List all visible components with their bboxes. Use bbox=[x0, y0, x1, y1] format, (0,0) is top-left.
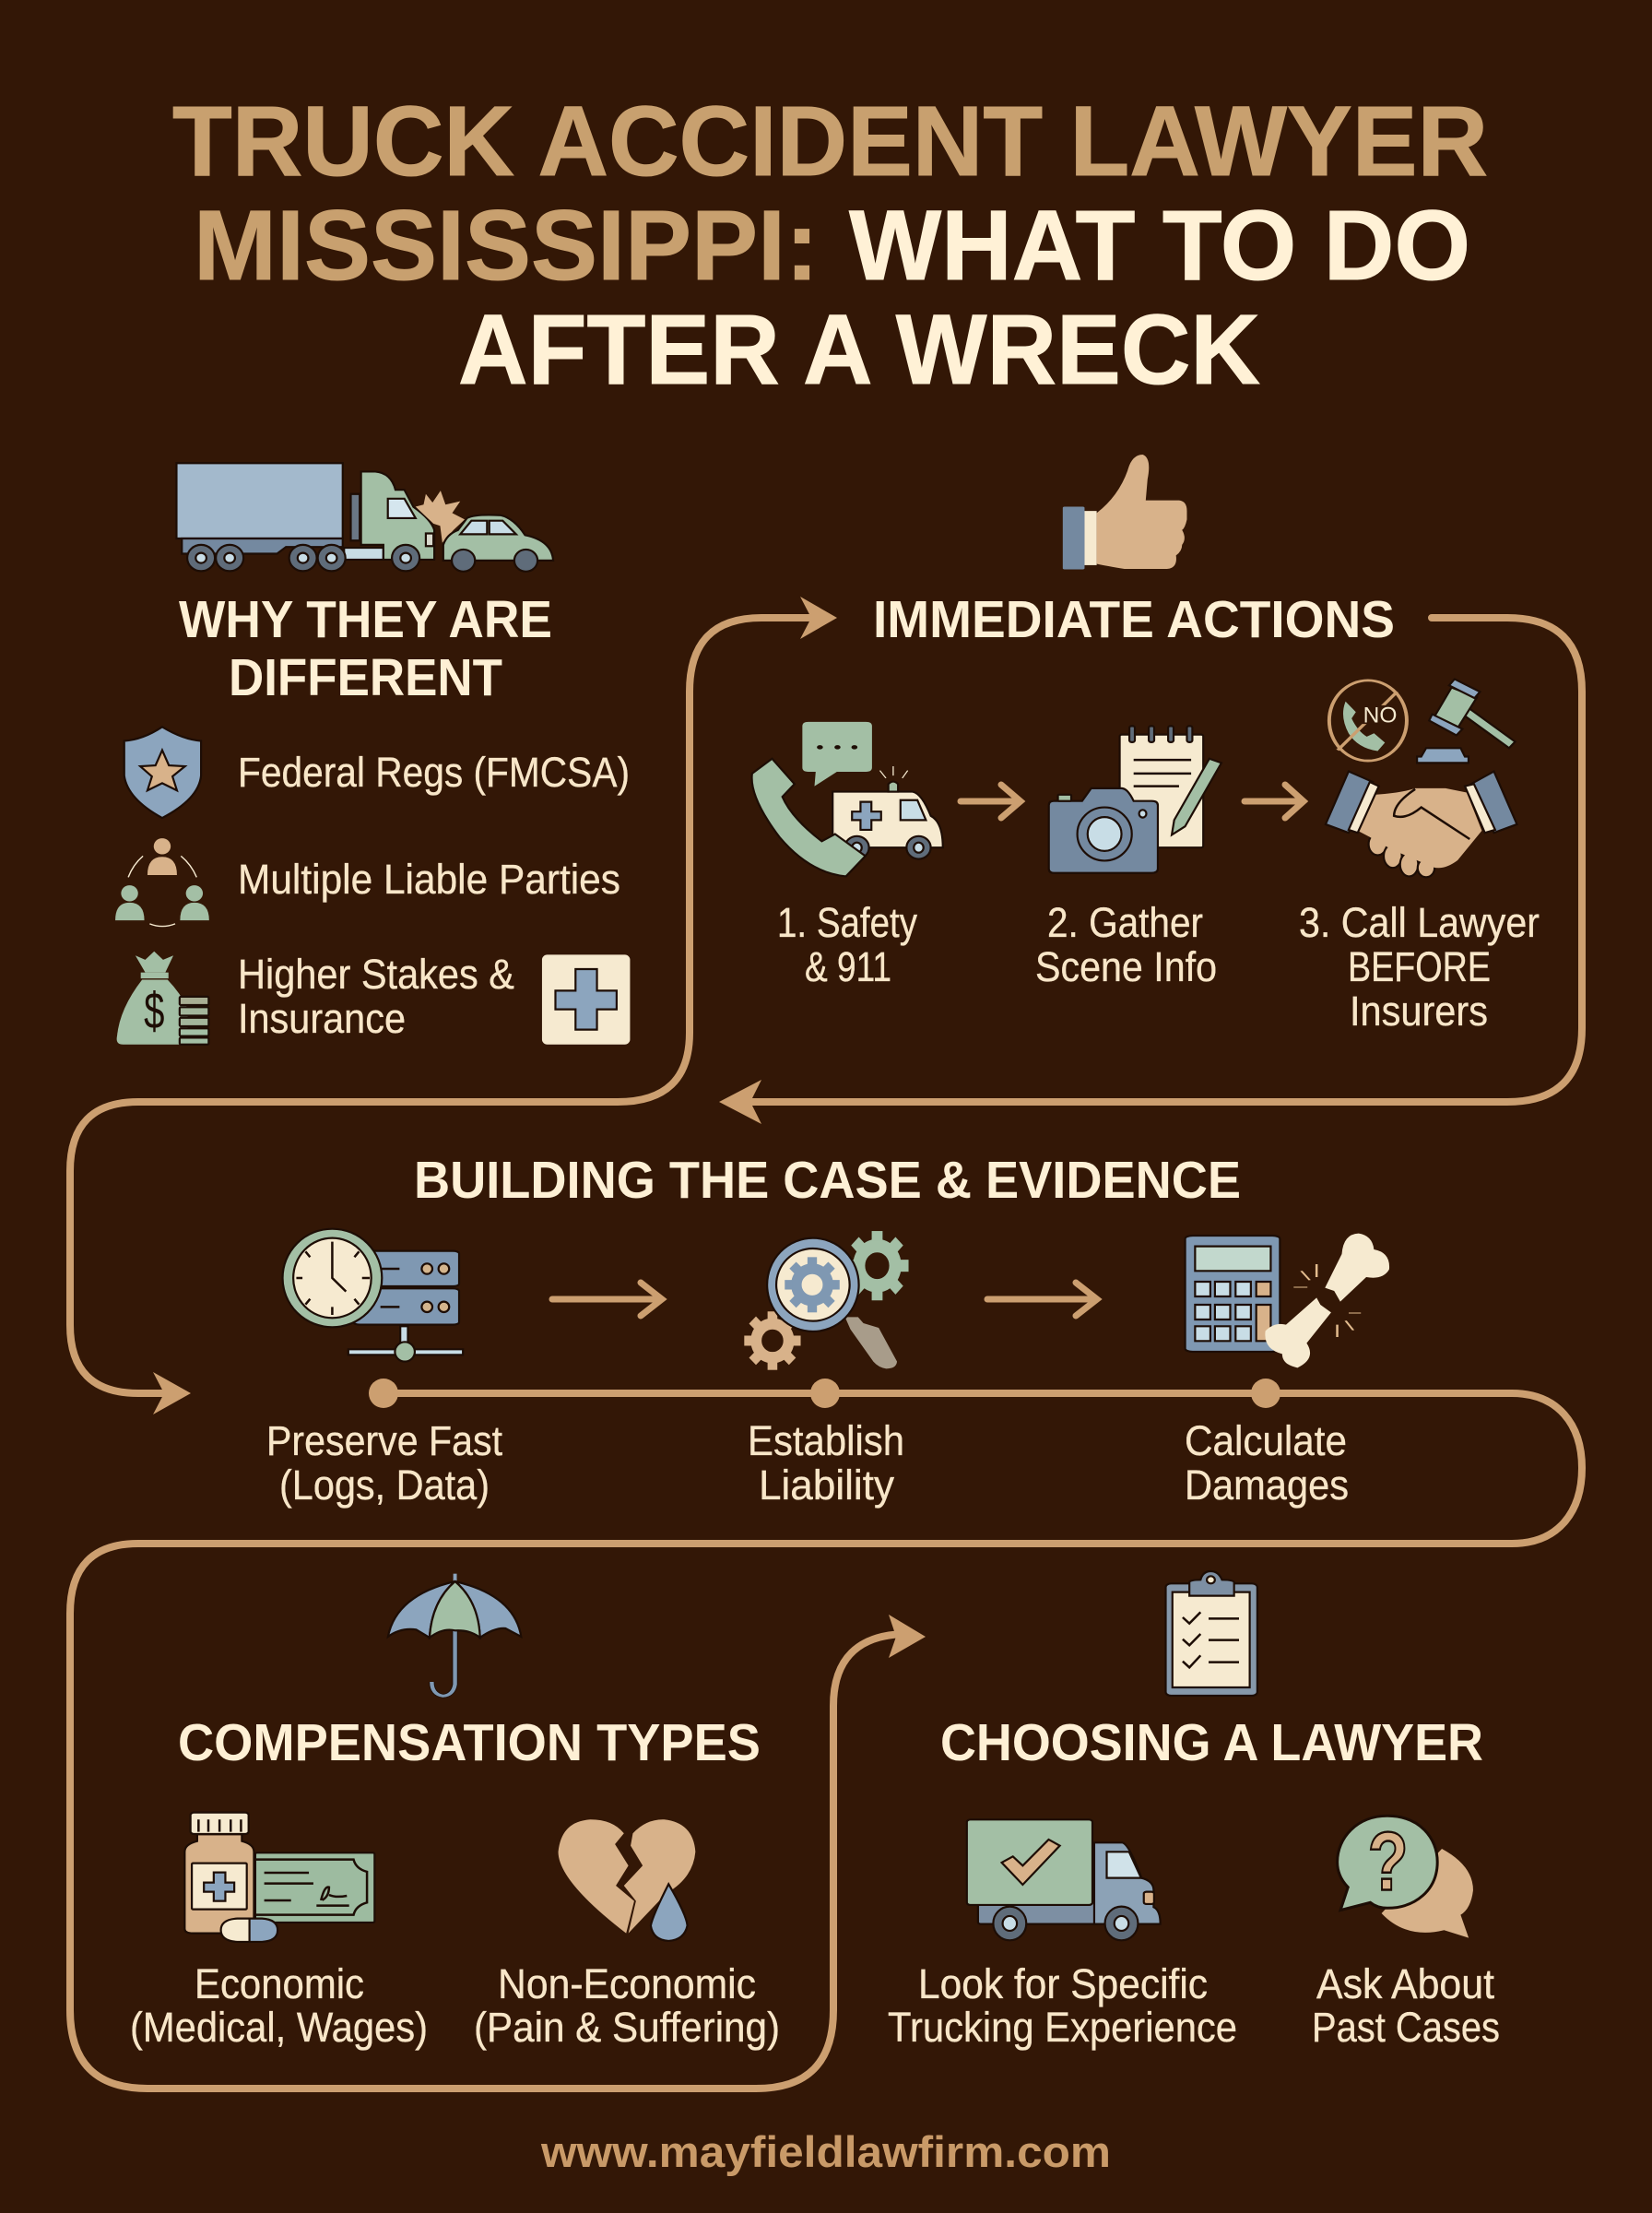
text: higher stakes and insurance bbox=[238, 951, 514, 1042]
text: non-economic bbox=[474, 1960, 780, 2051]
text: preserve fast bbox=[266, 1417, 502, 1509]
icon: thumbs up bbox=[1063, 455, 1186, 570]
text: gather scene info: 2. Gather bbox=[1047, 899, 1203, 946]
text: safety and 911: & 911 bbox=[805, 943, 891, 990]
panel: compensation types bbox=[130, 1574, 780, 2051]
flow path: immediate actions around to building the case bbox=[719, 618, 1582, 1124]
icon: no calls, gavel and handshake: NO bbox=[1363, 703, 1397, 728]
icon: multiple people in a circle bbox=[115, 838, 209, 927]
text: safety and 911: 1. Safety bbox=[777, 899, 917, 946]
text: look for specific experience: Trucking Experience bbox=[888, 2004, 1237, 2051]
panel: why they are different bbox=[115, 463, 630, 1045]
text: economic bbox=[130, 1960, 428, 2051]
text: calculate damages bbox=[1185, 1417, 1349, 1509]
icon: shield with star bbox=[124, 727, 201, 818]
text: ask about past cases: Past Cases bbox=[1312, 2004, 1500, 2051]
text: call lawyer before insurers: Insurers bbox=[1350, 988, 1488, 1035]
icon: no calls, gavel and handshake bbox=[1326, 679, 1517, 877]
icon: truck crashing into car bbox=[176, 463, 553, 572]
icon: clipboard checklist bbox=[1165, 1571, 1257, 1696]
text: higher stakes and insurance: Insurance bbox=[238, 995, 406, 1042]
title: WHAT TO DO bbox=[849, 189, 1470, 301]
arrow bbox=[552, 1283, 662, 1316]
text: establish liability bbox=[748, 1417, 904, 1509]
text: higher stakes and insurance: Higher Stakes & bbox=[238, 951, 514, 998]
text: preserve fast: Preserve Fast bbox=[266, 1417, 502, 1464]
text: calculate damages: Damages bbox=[1185, 1462, 1349, 1509]
icon: camera and notepad with pen bbox=[1049, 726, 1221, 873]
heading: why they are different: WHY THEY ARE bbox=[179, 590, 552, 649]
icon: medicine bottle, cheque and pill bbox=[184, 1813, 374, 1942]
icon: magnifying glass with gears bbox=[744, 1231, 909, 1370]
text: call lawyer before insurers: BEFORE bbox=[1348, 943, 1491, 990]
text: multiple liable parties: Multiple Liable Parties bbox=[238, 856, 620, 903]
panel: immediate actions bbox=[752, 455, 1540, 1035]
text: non-economic: (Pain & Suffering) bbox=[474, 2004, 780, 2051]
text: look for specific experience bbox=[888, 1960, 1237, 2051]
text: gather scene info bbox=[1035, 899, 1217, 990]
heading: why they are different: DIFFERENT bbox=[229, 648, 502, 707]
text: establish liability: Establish bbox=[748, 1417, 904, 1464]
flow path: evidence timeline through compensation to choosing a lawyer bbox=[70, 1393, 1582, 2089]
text: calculate damages: Calculate bbox=[1185, 1417, 1347, 1464]
text: economic: Economic bbox=[195, 1960, 364, 2007]
text: call lawyer before insurers bbox=[1299, 899, 1540, 1035]
heading: why they are different bbox=[179, 590, 552, 707]
icon: medical cross card bbox=[542, 954, 630, 1045]
icon: question speech bubbles: ? bbox=[1368, 1816, 1409, 1908]
text: gather scene info: Scene Info bbox=[1035, 943, 1217, 990]
icon: money bag and coins bbox=[117, 952, 208, 1045]
timeline dots bbox=[369, 1379, 1280, 1408]
heading: immediate actions: IMMEDIATE ACTIONS bbox=[873, 590, 1395, 649]
arrow bbox=[1245, 785, 1304, 818]
icon: calculator and broken bone bbox=[1186, 1234, 1389, 1367]
text: economic: (Medical, Wages) bbox=[130, 2004, 428, 2051]
flow path: why different to immediate actions, ending at building the case bbox=[70, 597, 837, 1414]
icon: truck with checkmark bbox=[967, 1819, 1161, 1940]
text: call lawyer before insurers: 3. Call Lawyer bbox=[1299, 899, 1540, 946]
title: MISSISSIPPI: bbox=[194, 189, 819, 301]
text: safety and 911 bbox=[777, 899, 917, 990]
text: non-economic: Non-Economic bbox=[498, 1960, 756, 2007]
text: establish liability: Liability bbox=[759, 1462, 894, 1509]
icon: phone, chat bubble and ambulance bbox=[752, 722, 943, 876]
icon: question speech bubbles bbox=[1338, 1816, 1473, 1938]
panel: choosing a lawyer bbox=[888, 1571, 1500, 2051]
website url: www.mayfieldlawfirm.com bbox=[540, 2127, 1111, 2176]
text: look for specific experience: Look for Specific bbox=[918, 1960, 1208, 2007]
icon: broken heart with tear bbox=[559, 1819, 695, 1941]
arrow bbox=[987, 1283, 1097, 1316]
title: TRUCK ACCIDENT LAWYER bbox=[172, 85, 1488, 196]
heading: choosing a lawyer: CHOOSING A LAWYER bbox=[940, 1713, 1483, 1772]
heading: compensation types: COMPENSATION TYPES bbox=[178, 1713, 761, 1772]
text: ask about past cases bbox=[1312, 1960, 1500, 2051]
text: ask about past cases: Ask About bbox=[1316, 1960, 1494, 2007]
icon: money bag and coins: $ bbox=[144, 983, 164, 1040]
title: AFTER A WRECK bbox=[458, 293, 1260, 405]
arrow bbox=[961, 785, 1021, 818]
text: preserve fast: (Logs, Data) bbox=[279, 1462, 490, 1509]
title bbox=[172, 85, 1488, 405]
panel: building the case and evidence bbox=[266, 1151, 1389, 1509]
text: federal regs: Federal Regs (FMCSA) bbox=[238, 749, 630, 796]
icon: umbrella bbox=[388, 1574, 521, 1696]
heading: building the case: BUILDING THE CASE & EVIDENCE bbox=[414, 1151, 1241, 1210]
icon: clock and server bbox=[283, 1229, 463, 1362]
